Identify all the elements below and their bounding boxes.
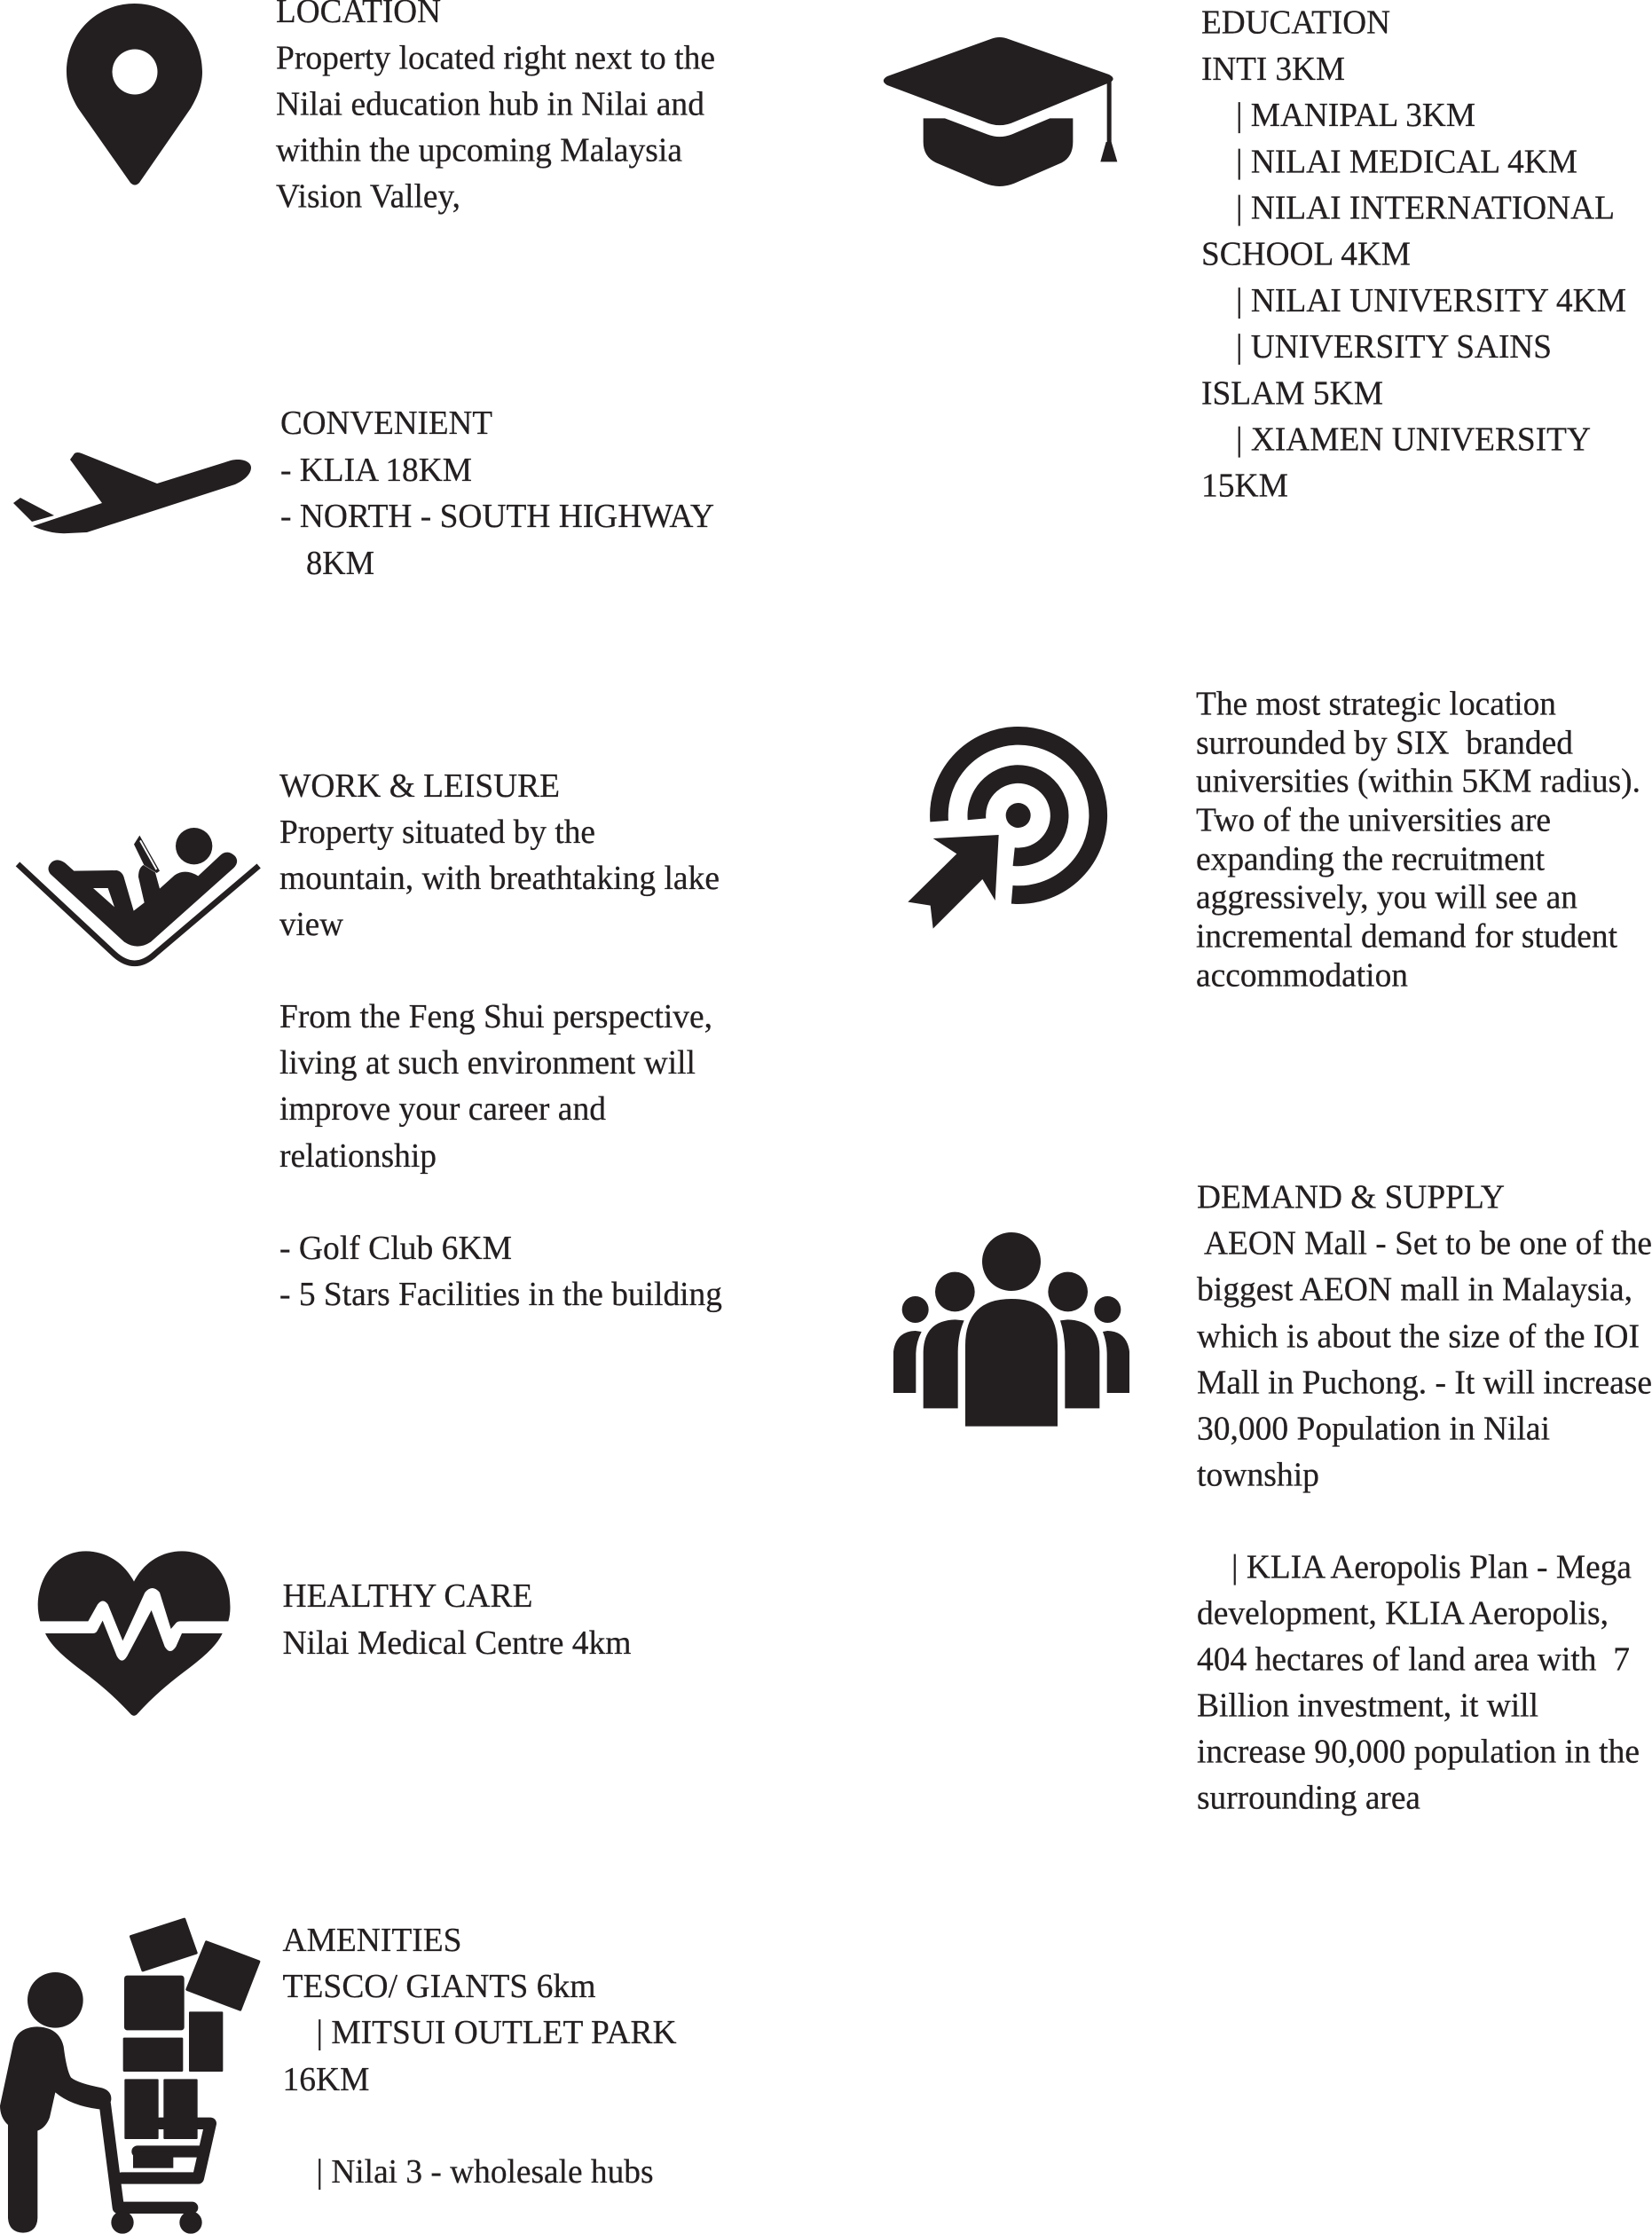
text: location: Property located right next to the	[276, 39, 715, 76]
text: demand and supply: township	[1197, 1457, 1319, 1494]
text: demand and supply: 404 hectares of land area with 7	[1197, 1641, 1630, 1679]
text: healthy care: HEALTHY CARE	[282, 1577, 532, 1615]
text: convenient: CONVENIENT	[280, 405, 492, 442]
text: location	[276, 0, 715, 215]
text: work and leisure: improve your career and	[279, 1090, 606, 1128]
text: convenient: 8KM	[306, 545, 374, 582]
text: education: EDUCATION	[1201, 4, 1390, 41]
text: strategic location: accommodation	[1196, 956, 1408, 994]
text: healthy care: Nilai Medical Centre 4km	[282, 1624, 632, 1662]
text: amenities: | MITSUI OUTLET PARK	[316, 2014, 677, 2051]
text: demand and supply: | KLIA Aeropolis Plan - Mega	[1231, 1549, 1632, 1586]
text: work and leisure	[279, 767, 722, 1313]
text: demand and supply: which is about the size of the IOI	[1197, 1318, 1640, 1356]
text: convenient: - NORTH - SOUTH HIGHWAY	[280, 498, 714, 535]
text: work and leisure: WORK & LEISURE	[279, 767, 560, 805]
text: demand and supply: development, KLIA Aeropolis,	[1197, 1595, 1609, 1632]
panel: strategic location	[908, 685, 1640, 994]
text: demand and supply: Billion investment, it will	[1197, 1687, 1538, 1725]
text: strategic location: The most strategic location	[1196, 685, 1556, 722]
text: education: 15KM	[1201, 467, 1288, 504]
text: education: INTI 3KM	[1201, 51, 1345, 88]
text: demand and supply: 30,000 Population in Nilai	[1197, 1411, 1550, 1448]
text: education: | MANIPAL 3KM	[1236, 97, 1475, 134]
text: strategic location: expanding the recruitment	[1196, 841, 1545, 878]
panel: location	[67, 0, 715, 215]
panel: education	[884, 4, 1626, 504]
text: work and leisure: mountain, with breathtaking lake	[279, 860, 720, 897]
text: strategic location: surrounded by SIX branded	[1196, 724, 1573, 761]
text: demand and supply: increase 90,000 population in the	[1197, 1734, 1640, 1771]
panel: amenities	[0, 1919, 677, 2234]
text: work and leisure: From the Feng Shui perspective,	[279, 998, 712, 1035]
text: education: | NILAI UNIVERSITY 4KM	[1236, 282, 1626, 319]
text: demand and supply	[1197, 1178, 1652, 1817]
panel: work and leisure	[18, 767, 722, 1313]
panel: healthy care	[38, 1551, 632, 1716]
text: demand and supply: AEON Mall - Set to be one of the	[1204, 1224, 1652, 1262]
panel: convenient	[13, 405, 714, 582]
text: demand and supply: Mall in Puchong. - It will increase	[1197, 1365, 1652, 1402]
icon: graduation cap	[884, 37, 1117, 186]
text: strategic location	[1196, 685, 1640, 994]
text: healthy care	[282, 1577, 632, 1662]
text: strategic location: aggressively, you will see an	[1196, 878, 1577, 916]
text: strategic location: incremental demand for student	[1196, 917, 1617, 955]
text: convenient	[280, 405, 714, 582]
text: amenities: TESCO/ GIANTS 6km	[282, 1968, 596, 2005]
text: work and leisure: - 5 Stars Facilities in the building	[279, 1276, 722, 1313]
text: work and leisure: - Golf Club 6KM	[279, 1230, 512, 1267]
text: education: SCHOOL 4KM	[1201, 236, 1411, 273]
text: work and leisure: living at such environment will	[279, 1044, 696, 1082]
text: education: | XIAMEN UNIVERSITY	[1236, 421, 1591, 458]
panel: demand and supply	[893, 1178, 1652, 1817]
text: demand and supply: DEMAND & SUPPLY	[1197, 1178, 1505, 1215]
text: amenities: 16KM	[282, 2061, 369, 2098]
icon: shopper with cart	[0, 1919, 259, 2234]
icon: map pin	[67, 4, 202, 185]
text: work and leisure: Property situated by the	[279, 814, 595, 851]
text: amenities: | Nilai 3 - wholesale hubs	[316, 2153, 653, 2191]
icon: airplane	[13, 452, 251, 533]
text: location: within the upcoming Malaysia	[276, 131, 682, 169]
text: education: | NILAI INTERNATIONAL	[1236, 190, 1615, 227]
icon: group of people	[893, 1232, 1129, 1427]
text: education: | NILAI MEDICAL 4KM	[1236, 144, 1577, 181]
text: demand and supply: biggest AEON mall in Malaysia,	[1197, 1270, 1632, 1308]
text: demand and supply: surrounding area	[1197, 1780, 1420, 1817]
text: convenient: - KLIA 18KM	[280, 452, 472, 489]
icon: heart with pulse	[38, 1551, 230, 1716]
text: amenities	[282, 1922, 677, 2191]
text: amenities: AMENITIES	[282, 1922, 461, 1959]
text: strategic location: universities (within 5KM radius).	[1196, 763, 1640, 800]
icon: person reclining with book	[18, 828, 259, 964]
text: education: ISLAM 5KM	[1201, 374, 1383, 412]
text: work and leisure: relationship	[279, 1137, 437, 1175]
text: location: Nilai education hub in Nilai and	[276, 85, 704, 122]
icon: target with arrow	[908, 735, 1098, 929]
text: location: Vision Valley,	[276, 177, 460, 215]
text: work and leisure: view	[279, 906, 343, 943]
text: education: | UNIVERSITY SAINS	[1236, 328, 1552, 366]
text: education	[1201, 4, 1626, 504]
text: strategic location: Two of the universities are	[1196, 802, 1551, 839]
